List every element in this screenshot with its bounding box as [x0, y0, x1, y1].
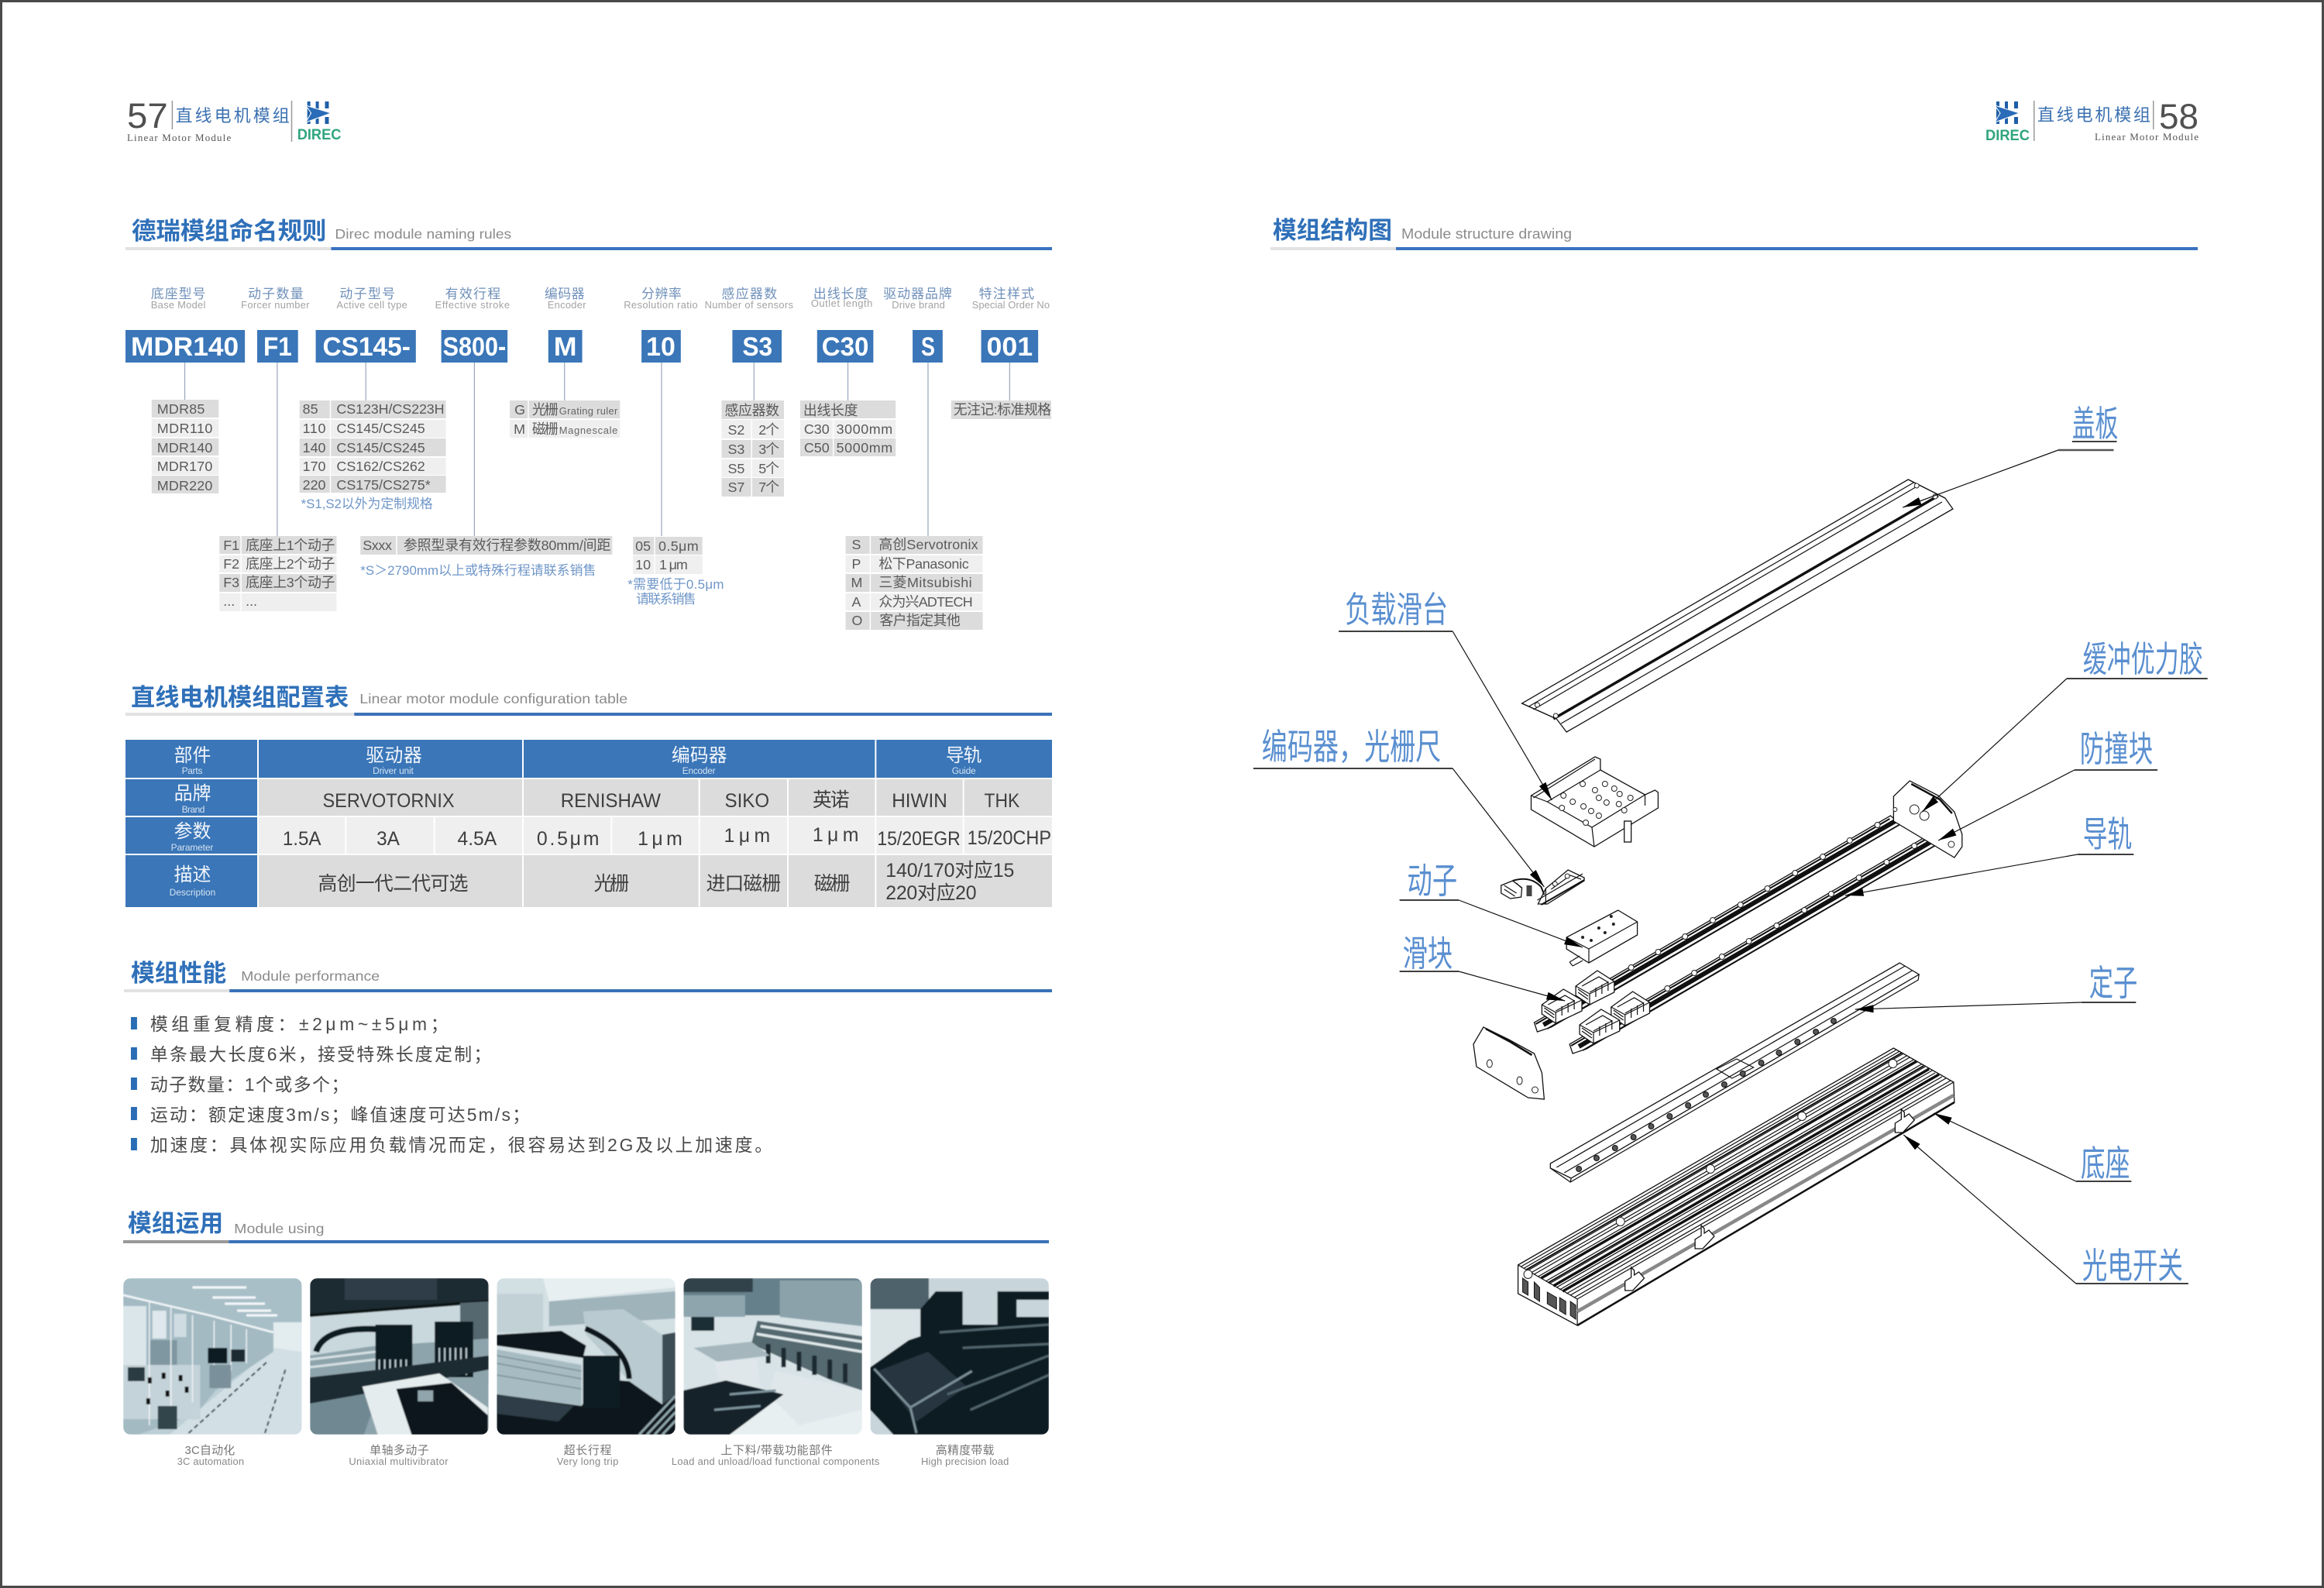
structure drawing with callouts [1253, 404, 2208, 1325]
heading: structure drawing: 模组结构图 [1273, 217, 1392, 244]
table: drive brand: M [851, 575, 862, 590]
heading: module using: 模组运用 [128, 1210, 223, 1237]
table: outlet length: 出线长度 [803, 403, 858, 418]
callout: cover plate [1903, 404, 2118, 507]
table: base models: MDR85 [157, 401, 205, 417]
table: base models: MDR140 [157, 440, 212, 455]
heading: configuration table [125, 684, 1052, 716]
table: sensors: 7个 [758, 479, 779, 495]
brand row [259, 779, 1052, 816]
table: forcer number: F1 [223, 538, 239, 553]
performance list: 加速度：具体视实际应用负载情况而定，很容易达到2G及以上加速度。 [150, 1135, 772, 1155]
table: outlet length: C50 [804, 440, 830, 455]
table: forcer number: ... [223, 593, 235, 609]
heading: naming rules [125, 218, 1052, 250]
model code boxes [125, 330, 1038, 363]
naming rule column labels: Special Order No [972, 299, 1050, 311]
left page header: 57 [127, 96, 168, 136]
table: outlet length [800, 400, 896, 456]
table: active cell types: CS145/CS245 [336, 421, 425, 436]
callout: cover plate: 盖板 [2072, 404, 2118, 444]
note: stroke: *S＞2790mm以上或特殊行程请联系销售 [360, 563, 596, 578]
naming rule column labels: Encoder [548, 299, 586, 311]
callout: stator: 定子 [2089, 964, 2137, 1003]
table: sensors: 2个 [758, 422, 779, 438]
callout: anti-collision block: 防撞块 [2080, 730, 2153, 769]
part: guide rail 1 [1534, 816, 1900, 1032]
callout: slider: 滑块 [1403, 934, 1452, 974]
callout: slider [1400, 934, 1565, 1001]
heading: naming rules: 德瑞模组命名规则 [132, 218, 326, 245]
exploded drawing [1473, 479, 1962, 1325]
table: encoder: 光栅 [532, 402, 559, 418]
part: motor coil [1566, 910, 1638, 966]
photo captions: Load and unload/load functional components [672, 1456, 880, 1467]
photo: uniaxial multivibrator [310, 1278, 489, 1435]
brand row: RENISHAW [561, 790, 661, 812]
top header row: 驱动器 [366, 745, 422, 766]
naming rule column labels: 特注样式 [979, 287, 1034, 301]
photo captions [177, 1444, 1009, 1467]
parameter row [259, 817, 1052, 854]
table: resolution: 1 μm [659, 557, 688, 572]
left page header: 直线电机模组 [176, 106, 290, 125]
table: sensors: 3个 [758, 442, 779, 457]
heading: structure drawing [1270, 217, 2198, 250]
logo: DIREC right [1985, 101, 2030, 144]
logo: DIREC left: DIREC [297, 127, 342, 143]
left header column: 品牌 [174, 783, 211, 804]
description row: 220对应20 [885, 882, 977, 904]
callout: forcer [1400, 861, 1583, 947]
description row: 光栅 [593, 873, 629, 895]
table: encoder: 磁栅 [532, 421, 559, 437]
photo captions: Uniaxial multivibrator [349, 1456, 449, 1467]
table: base models [152, 400, 218, 493]
callout: stator [1855, 964, 2137, 1009]
table: forcer number: 底座上1个动子 [246, 538, 335, 553]
table: active cell types: 170 [303, 459, 326, 474]
table: sensors: S7 [727, 479, 744, 495]
callout: base: 底座 [2081, 1144, 2130, 1184]
performance list: 动子数量：1个或多个； [150, 1074, 349, 1095]
performance list: 模组重复精度：±2μm~±5μm； [150, 1014, 449, 1034]
table: encoder: Magnescale [559, 424, 617, 436]
model code boxes: MDR140 [131, 332, 239, 362]
photo captions: 上下料/带载功能部件 [721, 1444, 833, 1457]
model code boxes: 001 [987, 332, 1033, 362]
heading: structure drawing: Module structure drawing [1401, 226, 1572, 242]
table: forcer number: 底座上3个动子 [246, 575, 335, 590]
model code boxes: M [554, 332, 577, 362]
description row: 进口磁栅 [706, 873, 781, 895]
naming rule column labels: 出线长度 [813, 287, 868, 301]
table: encoder: G [514, 402, 525, 418]
table: special order: 无注记:标准规格 [954, 402, 1051, 418]
photo: very long trip [497, 1278, 676, 1435]
heading: module using [123, 1210, 1049, 1243]
left header column: Brand [182, 804, 205, 815]
naming rule column labels: 分辨率 [641, 287, 682, 301]
parameter row: 1.5A [283, 828, 321, 850]
configuration table [125, 740, 1052, 907]
left header column [125, 740, 257, 907]
parameter row: 1μm [813, 824, 858, 846]
heading: module performance: Module performance [241, 968, 380, 984]
table: effective stroke: Sxxx [363, 538, 392, 553]
table: active cell types: 140 [303, 440, 326, 455]
callout: photoelectric switch: 光电开关 [2082, 1246, 2183, 1286]
left header column: Parts [182, 765, 202, 776]
part: guide rail 2 [1569, 837, 1936, 1054]
left header column: 部件 [174, 745, 211, 766]
callout: forcer: 动子 [1408, 861, 1457, 901]
callout: buffer [1922, 640, 2208, 812]
part: cover plate [1522, 479, 1953, 732]
photo captions: Very long trip [557, 1456, 618, 1467]
table: effective stroke: 参照型录有效行程参数80mm/间距 [404, 538, 610, 553]
heading: configuration table: 直线电机模组配置表 [131, 684, 349, 711]
naming rule column labels: 动子型号 [339, 287, 395, 301]
heading: module using: Module using [234, 1221, 325, 1236]
naming rule column labels [151, 287, 1050, 311]
note: S1 S2: *S1,S2以外为定制规格 [301, 497, 433, 511]
part: stator [1550, 963, 1919, 1182]
left header column: Parameter [171, 842, 213, 853]
heading: module performance: 模组性能 [131, 960, 226, 987]
part: load slide table [1531, 757, 1658, 847]
brand row: THK [985, 790, 1020, 812]
table: drive brand: A [852, 594, 861, 610]
logo: DIREC right: DIREC [1985, 128, 2030, 144]
model code boxes: CS145- [323, 332, 411, 362]
table: active cell types [300, 400, 446, 511]
callout: anti-collision block [1938, 730, 2157, 840]
photo captions: 超长行程 [564, 1444, 611, 1457]
naming rule column labels: 编码器 [545, 287, 585, 301]
table: drive brand: S [852, 537, 861, 552]
table: forcer number [219, 536, 336, 611]
photo: high precision load [870, 1278, 1049, 1435]
table: sensors: S2 [727, 422, 744, 438]
table: resolution: 0.5μm [658, 538, 699, 554]
parameter row: 1μm [638, 828, 682, 850]
naming rule column labels: Resolution ratio [624, 299, 698, 311]
brand row: SERVOTORNIX [323, 790, 455, 812]
right page header: 58 [2159, 97, 2199, 136]
brand row: HIWIN [892, 790, 947, 812]
naming rule column labels: 底座型号 [151, 287, 205, 301]
parameter row: 15/20CHP [968, 827, 1051, 849]
table: outlet length: C30 [804, 421, 830, 437]
connector lines [185, 363, 1009, 536]
description row: 140/170对应15 [885, 860, 1014, 882]
parameter row: 0.5μm [537, 828, 599, 850]
table: active cell types: 220 [303, 477, 326, 493]
table: active cell types: 85 [303, 401, 318, 417]
left page header: Linear Motor Module [127, 132, 231, 143]
table: active cell types: 110 [303, 421, 326, 436]
table: drive brand: 高创Servotronix [878, 537, 978, 552]
model code boxes: S3 [742, 332, 772, 362]
part: end plate bottom [1473, 1027, 1544, 1099]
part: encoder read head [1501, 870, 1584, 905]
model code boxes: F1 [263, 332, 292, 362]
brand row: 英诺 [813, 789, 850, 811]
table: forcer number: F2 [223, 556, 239, 572]
top header row: Guide [952, 765, 976, 776]
model code boxes: S [921, 332, 935, 362]
table: outlet length: 5000mm [837, 440, 892, 455]
description row: 高创一代二代可选 [318, 873, 469, 895]
table: outlet length: 3000mm [837, 421, 892, 437]
photo captions: 高精度带载 [936, 1444, 995, 1457]
right page header: 直线电机模组 [2037, 105, 2150, 125]
photo: 3C automation [123, 1278, 302, 1435]
callout: buffer: 缓冲优力胶 [2083, 640, 2203, 679]
top header row: 导轨 [946, 745, 982, 766]
table: encoder: M [514, 421, 525, 437]
photo captions: High precision load [921, 1456, 1009, 1467]
table: drive brand: 三菱Mitsubishi [878, 575, 972, 590]
part: sliders [1542, 971, 1649, 1043]
callout: photoelectric switch [1903, 1135, 2188, 1286]
performance list: 单条最大长度6米，接受特殊长度定制； [150, 1044, 491, 1064]
description row: 磁栅 [814, 873, 851, 895]
performance list [131, 1014, 772, 1155]
description row [259, 855, 1052, 907]
performance list: 运动：额定速度3m/s；峰值速度可达5m/s； [150, 1105, 530, 1125]
heading: naming rules: Direc module naming rules [335, 226, 511, 242]
left header column: 描述 [174, 864, 211, 885]
naming rule column labels: Forcer number [241, 299, 310, 311]
note: resolution [627, 577, 724, 607]
callout: encoder, grating [1253, 727, 1544, 887]
left header column: Description [170, 887, 215, 898]
table: encoder [510, 400, 620, 438]
note: resolution: 请联系销售 [636, 592, 696, 607]
right page header: Linear Motor Module [2095, 131, 2199, 143]
heading: module performance [124, 960, 1052, 992]
table: drive brand: 客户指定其他 [879, 613, 961, 628]
table: drive brand [846, 536, 983, 630]
naming rule column labels: Number of sensors [705, 299, 793, 311]
table: forcer number: 底座上2个动子 [246, 556, 335, 572]
table: effective stroke [360, 536, 612, 578]
left header column: 参数 [174, 821, 211, 842]
callout: load slide [1339, 590, 1552, 800]
table: encoder: Grating ruler [559, 405, 618, 417]
callout: guide rail: 导轨 [2083, 815, 2132, 854]
table: sensors: S5 [727, 461, 744, 476]
table: forcer number: F3 [223, 575, 239, 590]
table: drive brand: O [852, 613, 862, 628]
left page header [127, 96, 342, 143]
heading: configuration table: Linear motor module configuration table [359, 691, 627, 706]
table: base models: MDR110 [157, 421, 212, 436]
naming rule column labels: Base Model [151, 299, 206, 311]
part: end plate top [1893, 781, 1962, 858]
naming rule column labels: 驱动器品牌 [883, 287, 952, 301]
photo captions: 3C automation [177, 1456, 244, 1467]
parameter row: 15/20EGR [877, 828, 961, 850]
naming rule column labels: Active cell type [336, 299, 407, 311]
table: base models: MDR220 [157, 478, 212, 493]
left page content [123, 96, 1052, 1467]
top header row: 编码器 [672, 745, 727, 766]
right page header [1985, 97, 2199, 144]
parameter row: 3A [376, 828, 400, 850]
table: drive brand: 众为兴ADTECH [878, 594, 973, 610]
table: sensors: S3 [727, 442, 744, 457]
table: active cell types: CS123H/CS223H [336, 401, 445, 417]
table: sensors [722, 400, 784, 497]
naming rule column labels: 动子数量 [248, 287, 304, 301]
note: resolution: *需要低于0.5μm [627, 577, 724, 592]
logo: DIREC left [297, 101, 342, 143]
table: drive brand: 松下Panasonic [878, 556, 969, 572]
table: active cell types: CS162/CS262 [336, 459, 425, 474]
photo: load and unload [683, 1278, 862, 1435]
table: sensors: 感应器数 [724, 403, 779, 418]
parameter row: 1μm [724, 825, 770, 847]
table: forcer number: ... [246, 593, 257, 609]
naming rule column labels: 感应器数 [722, 287, 777, 301]
callout: encoder, grating: 编码器，光栅尺 [1262, 727, 1441, 767]
top header row: Encoder [682, 765, 716, 776]
table: sensors: 5个 [758, 461, 779, 476]
callout: load slide: 负载滑台 [1345, 590, 1448, 630]
naming rule column labels: 有效行程 [445, 287, 500, 301]
naming rule column labels: Outlet length [811, 297, 872, 309]
callout: guide rail [1845, 815, 2133, 895]
model code boxes: 10 [646, 332, 676, 362]
table: resolution: 05 [635, 538, 651, 554]
table: base models: MDR170 [157, 459, 212, 474]
table: resolution [627, 537, 724, 607]
model code boxes: S800- [443, 332, 506, 362]
part: photoelectric switches [1625, 1109, 1914, 1291]
naming rule column labels: Effective stroke [435, 299, 510, 311]
table: active cell types: CS145/CS245 [336, 440, 425, 455]
top header row: Driver unit [373, 765, 414, 776]
parameter row: 4.5A [458, 828, 497, 850]
photo captions: 3C自动化 [185, 1444, 235, 1457]
brand row: SIKO [724, 790, 769, 812]
table: drive brand: P [852, 556, 861, 572]
table: resolution: 10 [635, 557, 651, 572]
naming rule column labels: Drive brand [892, 299, 945, 311]
callout: base [1934, 1113, 2131, 1184]
photo captions: 单轴多动子 [370, 1444, 429, 1457]
top header row [259, 740, 1052, 778]
model code boxes: C30 [822, 332, 868, 362]
part: base [1518, 1048, 1954, 1325]
table: active cell types: CS175/CS275* [336, 477, 431, 493]
